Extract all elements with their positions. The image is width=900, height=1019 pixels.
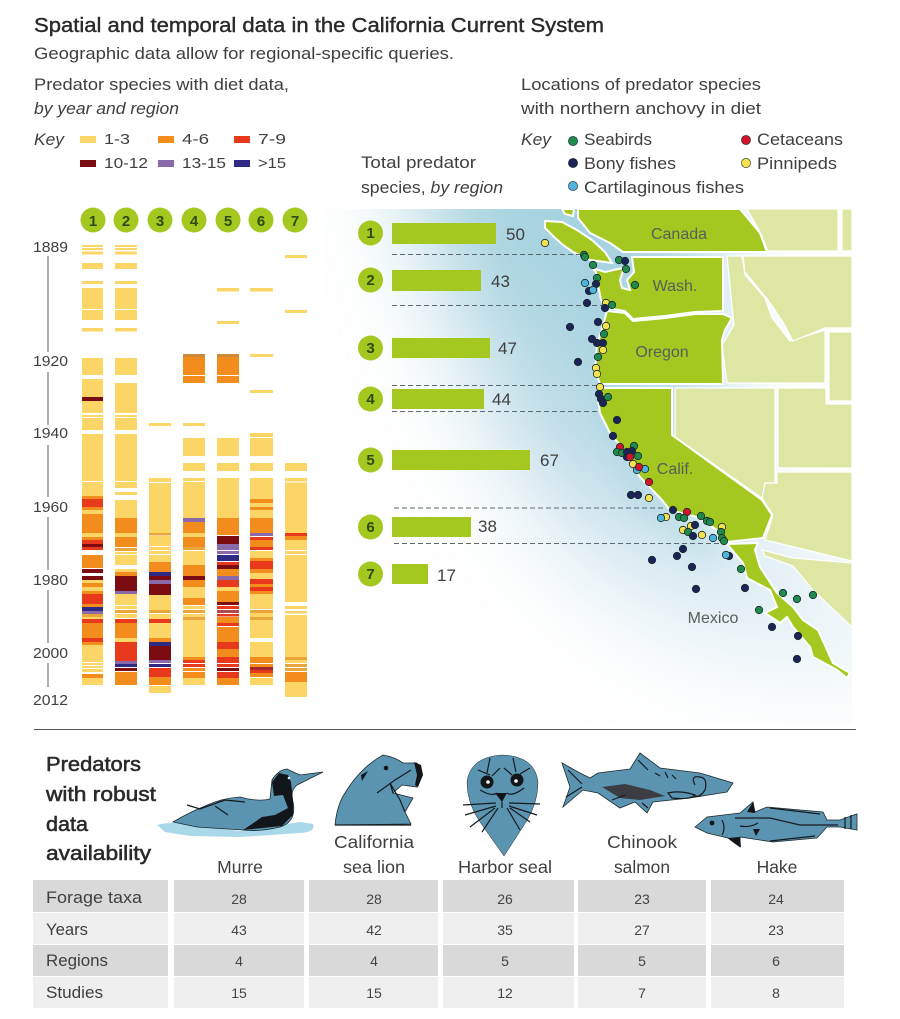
legend: heat map key: Key [34,130,66,149]
table: data availability: 42 [366,922,382,938]
legend: map key: Cartilaginous fishes [584,178,744,197]
bar chart: total predator species by region: 38 [478,517,497,536]
heading: total predator species: Total predator [361,153,476,172]
legend: heat map key: 4-6 [182,131,209,148]
subtitle: Geographic data allow for regional-specific queries. [34,45,454,63]
table: data availability: 24 [768,891,784,907]
bar chart: total predator species by region: 50 [506,225,525,244]
table: data availability: Regions [46,951,108,970]
table: data availability: 28 [366,891,382,907]
bar chart: total predator species by region: 6 [366,519,375,536]
legend: heat map key: 1-3 [104,131,130,148]
legend: map key [521,130,843,197]
table: data availability: 15 [366,985,382,1001]
map labels: Canada [651,226,707,243]
column 5 [217,288,239,685]
map: predator location dots [541,239,817,663]
heading: predator species with diet data: Predator species with diet data, [34,75,289,94]
legend: heat map key: 10-12 [104,155,148,172]
heat map column headers: 6 [257,213,265,230]
bar chart: total predator species by region: 2 [366,272,375,289]
icon: murre [157,769,323,837]
heat map column headers: 3 [156,213,164,230]
heat map column headers: 2 [122,213,130,230]
heading: locations of predator species [520,75,761,118]
label: Chinook salmon: Chinook [607,832,677,852]
table: data availability [33,880,844,1008]
table: data availability: Years [46,920,88,939]
legend: heat map key [34,130,286,172]
column 2 [115,245,137,685]
heat map: predator species per year and region [82,245,307,697]
legend: map key: Seabirds [584,130,652,149]
table: data availability: Studies [46,983,103,1002]
icon: California sea lion [335,755,423,825]
title: Spatial and temporal data in the California Current System [34,15,604,37]
legend: heat map key: >15 [258,155,286,172]
heat map column headers: 7 [291,213,299,230]
heat map axis: years [33,240,68,709]
table: data availability: 12 [497,985,513,1001]
heading: predators with robust data availability: Predators [46,753,141,776]
table: data availability: 4 [370,953,378,969]
section divider [34,728,856,730]
table: data availability: 35 [497,922,513,938]
column 7 [285,255,307,697]
label: California sea lion: California [334,832,414,852]
bar chart: total predator species by region: 44 [492,390,511,409]
heading: predators with robust data availability [45,753,156,865]
heading: locations of predator species: with northern anchovy in diet [520,99,761,118]
label: murre: Murre [217,857,263,877]
table: data availability: 4 [235,953,243,969]
heat map column headers: 4 [190,213,199,230]
heat map column headers [80,208,308,232]
bar chart: total predator species by region: 4 [366,391,375,408]
heading: predators with robust data availability: availability [46,842,152,865]
column 4 [183,354,205,685]
table: data availability: 8 [772,985,780,1001]
legend: map key: Bony fishes [584,154,676,173]
heading: locations of predator species: Locations of predator species [521,75,761,94]
legend: heat map key: 13-15 [182,155,226,172]
map labels [635,226,738,627]
legend: map key: Cetaceans [757,130,843,149]
heat map column headers: 1 [89,213,97,230]
map labels: Calif. [657,461,693,478]
column 6 [250,288,273,685]
heat map axis: years: 1889 [33,240,68,256]
table: data availability: 15 [231,985,247,1001]
heat map column headers: 5 [224,213,232,230]
table: data availability: 23 [634,891,650,907]
bar chart: total predator species by region: 67 [540,451,559,470]
table: data availability: 23 [768,922,784,938]
heading: predator species with diet data: by year and region [34,99,179,118]
table: data availability: 7 [638,985,646,1001]
column 1 [82,245,103,685]
map labels: Mexico [688,610,738,627]
table: data availability: 5 [501,953,509,969]
bar chart: total predator species by region [358,220,559,586]
column 3 [149,423,171,693]
heat map axis: years: 1960 [33,500,68,516]
table: data availability: 27 [634,922,650,938]
heat map axis: years: 1920 [33,354,68,370]
bright green coastal regions [545,209,850,678]
legend: map key: Pinnipeds [757,154,837,173]
icon: harbor seal [463,755,540,856]
region divider lines [392,254,725,544]
heading: predators with robust data availability: with robust [45,783,156,806]
legend: heat map key: 7-9 [258,131,286,148]
map: California Current region [360,209,852,692]
heading: predators with robust data availability: data [46,813,89,836]
label: harbor seal: Harbor seal [458,857,552,877]
table: data availability: 28 [231,891,247,907]
legend: map key: Key [521,130,553,149]
bar chart: total predator species by region: 1 [366,225,375,242]
text: sea lion [343,857,405,877]
heat map axis: years: 1940 [33,426,68,442]
heading: total predator species [361,153,503,197]
table: data availability: 43 [231,922,247,938]
table: data availability: 6 [772,953,780,969]
text: salmon [614,857,670,877]
bar chart: total predator species by region: 43 [491,272,510,291]
pale neighbouring regions [675,209,852,627]
label: hake: Hake [757,857,797,877]
icon: hake [695,802,857,847]
heat map axis: years: 1980 [33,573,68,589]
map labels: Oregon [635,344,689,361]
heat map axis: years: 2000 [33,646,68,662]
bar chart: total predator species by region: 3 [366,340,375,357]
bar chart: total predator species by region: 17 [437,566,456,585]
heat map axis: years: 2012 [33,693,68,709]
heading: predator species with diet data [34,75,289,118]
bar chart: total predator species by region: 5 [366,452,375,469]
bar chart: total predator species by region: 7 [366,566,375,583]
map labels: Wash. [653,278,697,295]
table: data availability: Forage taxa [46,888,143,907]
bar chart: total predator species by region: 47 [498,339,517,358]
table: data availability: 5 [638,953,646,969]
icon: Chinook salmon [562,753,733,813]
heading: total predator species: species, by region [361,178,503,197]
table: data availability: 26 [497,891,513,907]
